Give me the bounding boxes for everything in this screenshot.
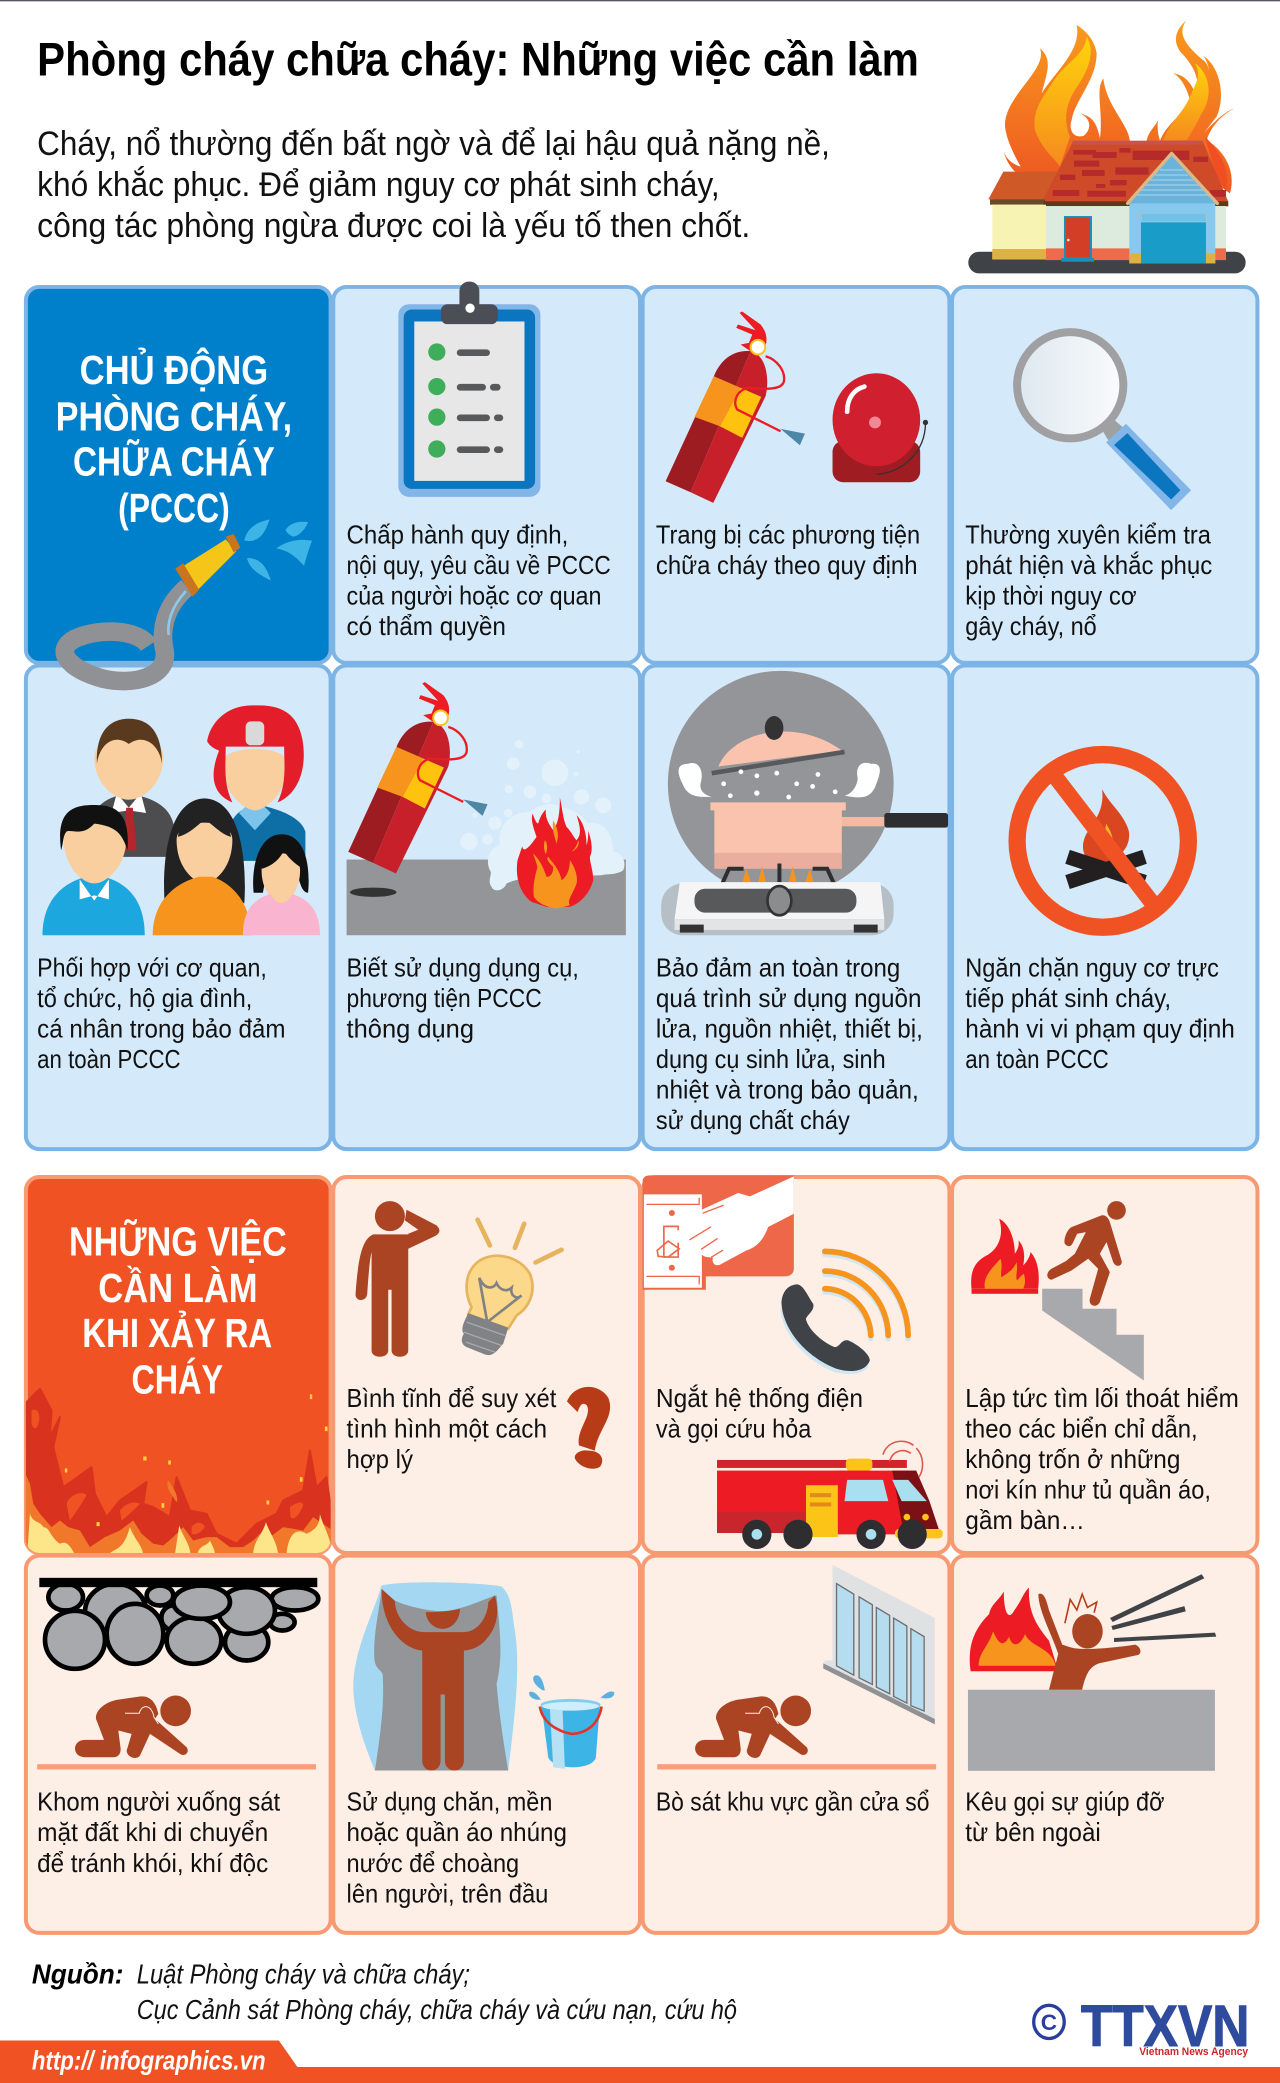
footer bar: http:// infographics.vn: [32, 2046, 266, 2076]
text: stay calm: [347, 1385, 556, 1474]
source text: Cục Cảnh sát Phòng cháy, chữa cháy và cứu nạn, cứu hộ: [137, 1994, 737, 2025]
text: cut power and call: và gọi cứu hỏa: [656, 1415, 812, 1443]
panel: header PCCC: (PCCC): [118, 485, 230, 531]
text: equipment: Trang bị các phương tiện: [656, 521, 920, 549]
text: stay calm: Bình tĩnh để suy xét: [347, 1385, 556, 1413]
icon: magnifying glass: [1017, 332, 1191, 510]
text: wet blanket: [347, 1789, 567, 1908]
text: crawl to window: Bò sát khu vực gần cửa sổ: [656, 1789, 929, 1817]
text: crouch low: Khom người xuống sát: [37, 1789, 280, 1817]
text: safe cooking: dụng cụ sinh lửa, sinh: [656, 1046, 886, 1074]
icon: flames background: [24, 1389, 333, 1554]
panel: header what to do: [24, 1177, 333, 1554]
intro text: [37, 125, 830, 245]
text: coordination: cá nhân trong bảo đảm: [37, 1016, 285, 1044]
text: coordination: [37, 954, 285, 1074]
panel: find exit: [952, 1177, 1257, 1553]
intro text: công tác phòng ngừa được coi là yếu tố then chốt.: [37, 207, 750, 245]
text: using equipment: phương tiện PCCC: [347, 985, 542, 1013]
text: using equipment: Biết sử dụng dụng cụ,: [347, 954, 579, 982]
text: call for help: từ bên ngoài: [965, 1819, 1101, 1847]
icon: burning house: [968, 20, 1246, 273]
icon: light bulb: [462, 1220, 562, 1355]
text: using equipment: thông dụng: [347, 1016, 474, 1044]
text: coordination: an toàn PCCC: [37, 1046, 181, 1074]
icon: smoke clouds: [39, 1578, 318, 1669]
panel: regulations: [333, 282, 640, 663]
text: stay calm: tình hình một cách: [347, 1415, 547, 1443]
text: coordination: Phối hợp với cơ quan,: [37, 954, 267, 982]
panel: call for help: [952, 1556, 1257, 1933]
text: find exit: theo các biển chỉ dẫn,: [965, 1414, 1198, 1443]
panel: inspection: [952, 287, 1257, 663]
text: crouch low: mặt đất khi di chuyển: [37, 1819, 268, 1847]
text: safe cooking: quá trình sử dụng nguồn: [656, 985, 921, 1013]
text: inspection: Thường xuyên kiểm tra: [965, 521, 1211, 549]
intro text: khó khắc phục. Để giảm nguy cơ phát sinh cháy,: [37, 165, 720, 204]
logo: TTXVN: C: [1041, 2010, 1057, 2035]
text: wet blanket: hoặc quần áo nhúng: [347, 1819, 567, 1847]
panel: header PCCC: CHỮA CHÁY: [73, 439, 275, 485]
logo: TTXVN: Vietnam News Agency: [1139, 2046, 1248, 2058]
panel: cut power and call: [643, 1175, 949, 1553]
text: crouch low: [37, 1789, 280, 1878]
source text: Luật Phòng cháy và chữa cháy;: [137, 1958, 470, 1989]
text: safe cooking: lửa, nguồn nhiệt, thiết bị,: [656, 1016, 923, 1044]
icon: water bucket: [529, 1675, 614, 1769]
source text: Nguồn:: [32, 1958, 123, 1989]
text: safe cooking: nhiệt và trong bảo quản,: [656, 1077, 919, 1105]
text: find exit: [965, 1385, 1239, 1535]
icon: thinking person: [356, 1201, 439, 1357]
text: safe cooking: sử dụng chất cháy: [656, 1107, 850, 1135]
icon: extinguishing fire: [347, 682, 626, 935]
text: safe cooking: Bảo đảm an toàn trong: [656, 954, 900, 982]
text: prevent ignition: [965, 954, 1235, 1074]
icon: fire hose: [65, 519, 312, 681]
panel: coordination: [26, 666, 331, 1149]
icon: question mark: [567, 1387, 610, 1469]
logo: TTXVN: TTXVN: [1081, 1994, 1249, 2059]
text: regulations: nội quy, yêu cầu về PCCC: [347, 552, 611, 580]
icon: fire extinguisher: [666, 312, 805, 503]
panel: using equipment: [333, 666, 640, 1149]
icon: crawling person: [695, 1696, 811, 1758]
text: wet blanket: nước để choàng: [347, 1850, 519, 1878]
text: regulations: của người hoặc cơ quan: [347, 582, 601, 610]
text: regulations: Chấp hành quy định,: [347, 521, 568, 549]
text: prevent ignition: Ngăn chặn nguy cơ trực: [965, 954, 1219, 982]
text: prevent ignition: hành vi vi phạm quy định: [965, 1016, 1235, 1044]
icon: clipboard: [398, 282, 540, 497]
icon: no fire sign: [1017, 755, 1188, 927]
panel: header what to do: CHÁY: [131, 1357, 223, 1403]
panel: header what to do: KHI XẢY RA: [82, 1310, 272, 1356]
icon: alarm bell: [833, 373, 928, 482]
text: equipment: [656, 521, 920, 580]
icon: hand on switch: [643, 1175, 794, 1290]
text: find exit: gầm bàn…: [965, 1507, 1085, 1535]
panel: wet blanket: [333, 1556, 640, 1933]
text: call for help: [965, 1789, 1164, 1847]
text: cut power and call: Ngắt hệ thống điện: [656, 1384, 863, 1413]
panel: stay calm: [333, 1177, 640, 1553]
text: using equipment: [347, 954, 579, 1044]
text: regulations: có thẩm quyền: [347, 613, 506, 641]
text: call for help: Kêu gọi sự giúp đỡ: [965, 1789, 1164, 1817]
text: safe cooking: [656, 954, 923, 1135]
text: find exit: không trốn ở những: [965, 1446, 1180, 1474]
panel: header PCCC: PHÒNG CHÁY,: [56, 393, 292, 439]
text: crouch low: để tránh khói, khí độc: [37, 1850, 268, 1878]
text: regulations: [347, 521, 611, 641]
panel: safe cooking: [643, 666, 949, 1149]
icon: window: [823, 1565, 935, 1724]
icon: telephone with signal: [781, 1251, 908, 1374]
source text: [32, 1958, 737, 2025]
panel: header PCCC: [26, 287, 331, 663]
title: Phòng cháy chữa cháy: Những việc cần làm: [37, 33, 919, 86]
panel: crawl to window: [643, 1556, 949, 1933]
text: inspection: kịp thời nguy cơ: [965, 582, 1137, 610]
text: prevent ignition: an toàn PCCC: [965, 1046, 1109, 1074]
text: stay calm: hợp lý: [347, 1446, 413, 1474]
icon: pot on stove: [661, 671, 948, 935]
text: inspection: phát hiện và khắc phục: [965, 551, 1212, 580]
icon: group of people: [42, 705, 320, 935]
panel: header what to do: CẦN LÀM: [98, 1265, 258, 1311]
intro text: Cháy, nổ thường đến bất ngờ và để lại hậu quả nặng nề,: [37, 125, 830, 163]
icon: crawling person: [75, 1696, 191, 1758]
text: inspection: gây cháy, nổ: [965, 613, 1097, 641]
text: equipment: chữa cháy theo quy định: [656, 552, 918, 580]
panel: header what to do: NHỮNG VIỆC: [69, 1218, 287, 1264]
panel: prevent ignition: [952, 666, 1257, 1149]
icon: person calling from flames: [968, 1574, 1216, 1771]
text: inspection: [965, 521, 1212, 641]
text: cut power and call: [656, 1384, 863, 1443]
footer bar: [0, 2040, 1280, 2083]
icon: person under blanket: [353, 1582, 517, 1771]
panel: header PCCC: CHỦ ĐỘNG: [80, 347, 268, 393]
text: find exit: nơi kín như tủ quần áo,: [965, 1476, 1211, 1504]
panel: equipment: [643, 287, 949, 663]
text: prevent ignition: tiếp phát sinh cháy,: [965, 985, 1171, 1013]
icon: fire truck: [717, 1441, 943, 1549]
text: wet blanket: lên người, trên đầu: [347, 1880, 548, 1908]
text: wet blanket: Sử dụng chăn, mền: [347, 1789, 552, 1817]
panel: crouch low: [26, 1556, 331, 1933]
text: find exit: Lập tức tìm lối thoát hiểm: [965, 1385, 1239, 1413]
icon: flame and runner on stairs: [971, 1201, 1144, 1380]
text: coordination: tổ chức, hộ gia đình,: [37, 985, 252, 1013]
